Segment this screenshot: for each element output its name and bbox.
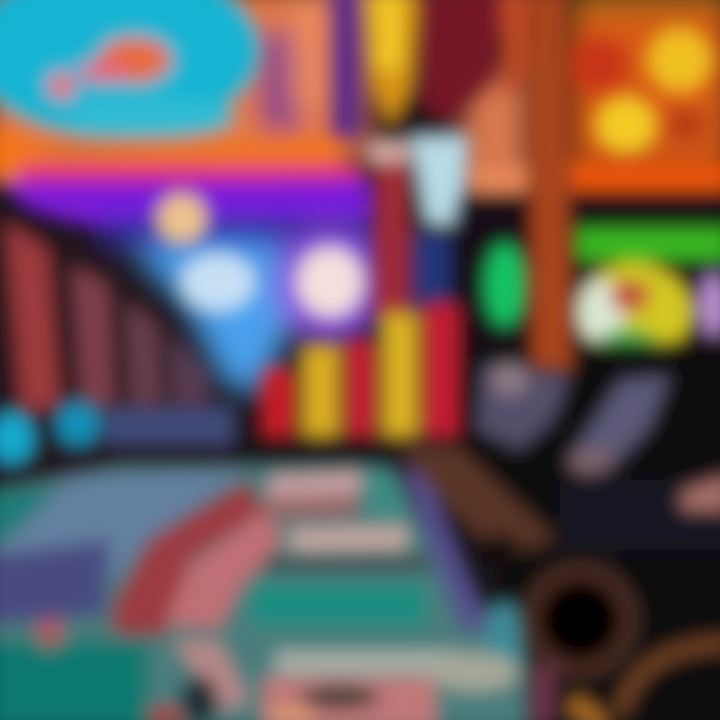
cyan cloud sign [0, 0, 260, 138]
dark right wall [458, 200, 720, 365]
upper wall panel [0, 0, 720, 185]
grey chair screens [475, 360, 720, 512]
centre blue and white lights [100, 220, 385, 395]
green screen left [483, 241, 527, 329]
top right yellow lights [570, 28, 712, 153]
central column with white and blue panel [368, 135, 468, 320]
cyan lamps [0, 400, 102, 466]
dark left wall with red stripes [0, 190, 235, 480]
table edge [395, 445, 560, 630]
dark chairs area [440, 345, 720, 720]
table pink stripes [112, 470, 520, 720]
casino table [0, 465, 530, 720]
green band and colourful wheel [574, 226, 720, 362]
top centre drapes [330, 0, 532, 140]
red-brown pillar [528, 0, 574, 372]
chair backs [482, 536, 720, 720]
red and yellow columns [262, 302, 460, 438]
orange and purple bands [0, 125, 720, 226]
